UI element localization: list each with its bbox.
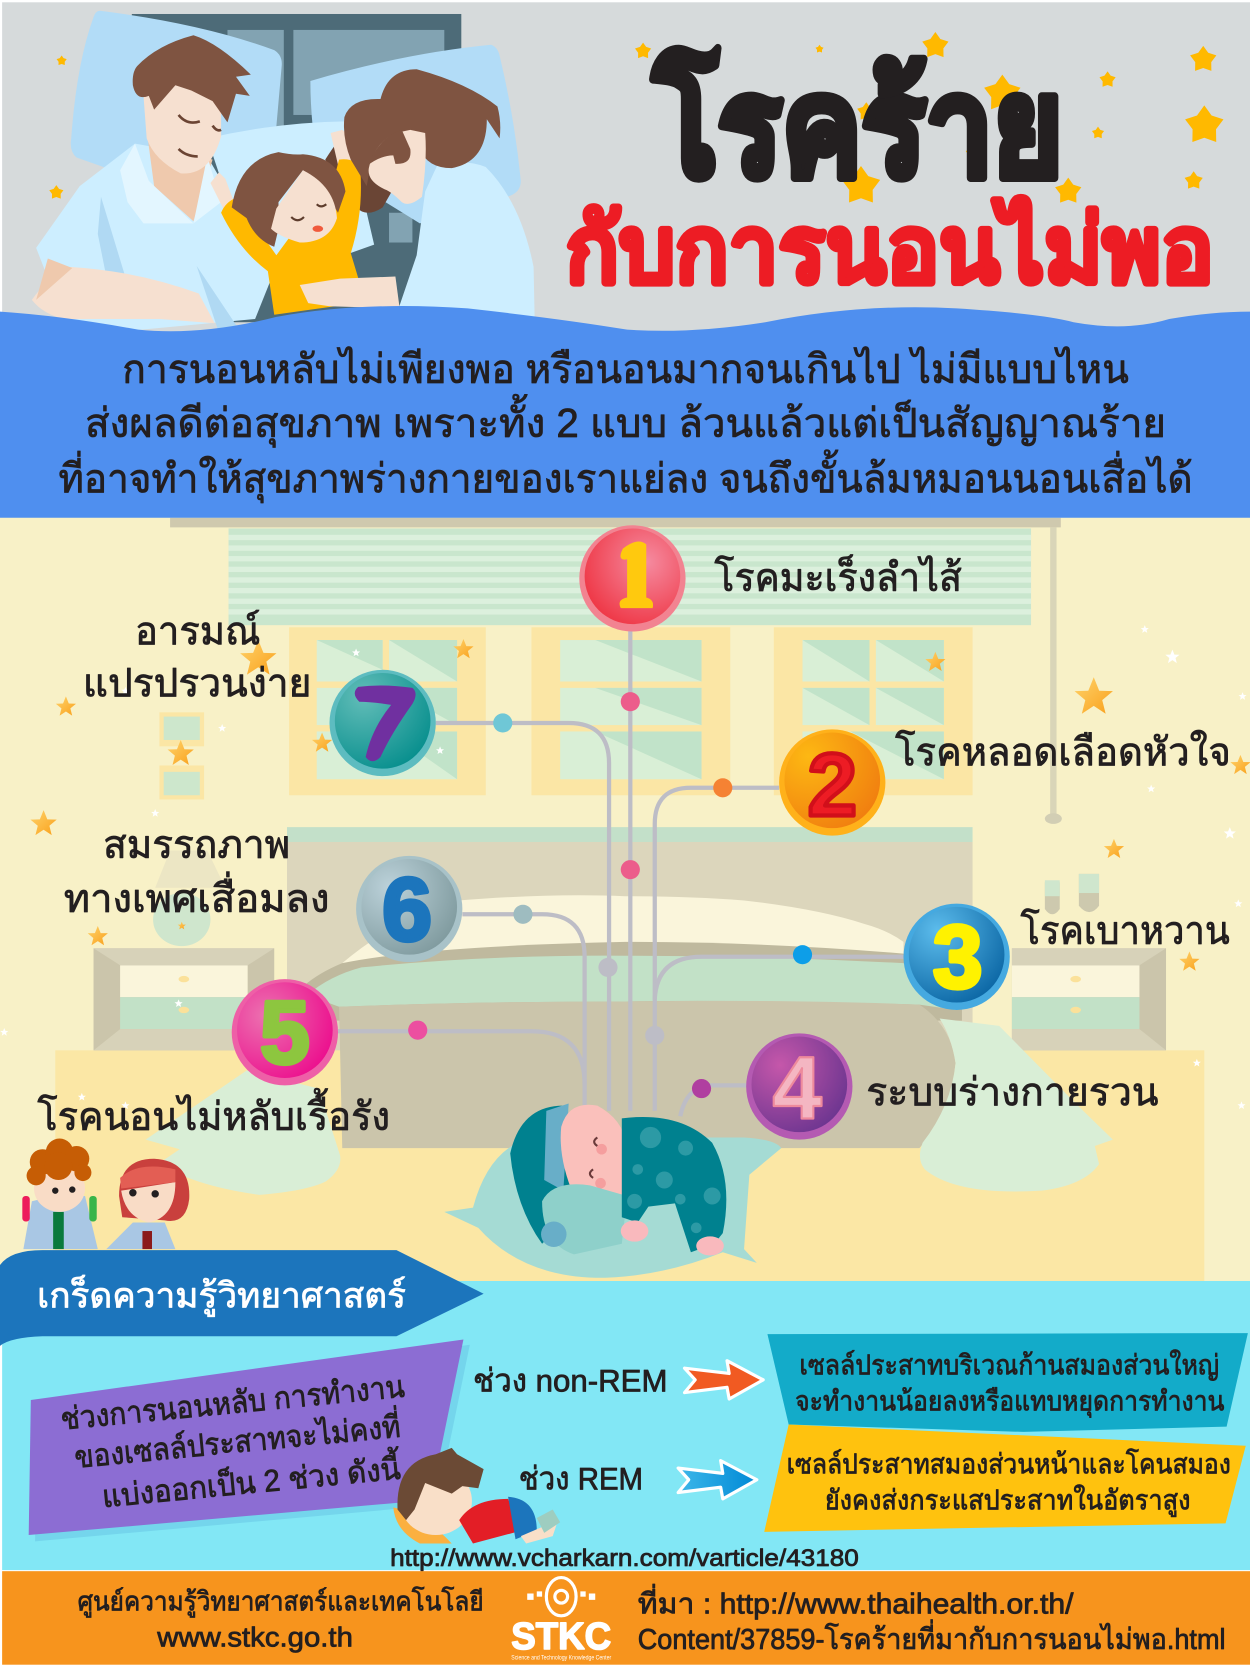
badge 2 [779, 729, 885, 836]
illustration: sleeping baby [444, 1103, 781, 1278]
illustration: sleeping family [32, 11, 535, 332]
boy pillow [393, 1507, 452, 1544]
left bed sheet [146, 1071, 340, 1195]
child left hand [210, 172, 236, 213]
blanket band [303, 942, 962, 1021]
badge 4: 4 [772, 1037, 822, 1137]
panel: science facts [0, 1250, 1250, 1572]
ribbon heading [0, 1250, 484, 1346]
label 6: สมรรถภาพ [103, 823, 290, 867]
badge 1 [579, 525, 686, 632]
child eyes mouth [291, 204, 326, 220]
label 7: แปรปรวนง่าย [83, 661, 311, 705]
center pillow [207, 121, 374, 279]
label 7 [83, 609, 311, 705]
man neck [148, 138, 213, 221]
boy hair [27, 1139, 91, 1185]
label 3: โรคเบาหวาน [1020, 908, 1230, 953]
intro text: ส่งผลดีต่อสุขภาพ เพราะทั้ง 2 แบบ ล้วนแล้วแต่เป็นสัญญาณร้าย [85, 394, 1166, 448]
wave shape [0, 306, 1250, 518]
window blind [229, 528, 1031, 625]
panel: footer [2, 1571, 1250, 1665]
badge 7 [330, 670, 436, 776]
icon: STKC logo: Science and Technology Knowledge Center [511, 1654, 612, 1661]
teal box [767, 1333, 1248, 1432]
suit spots [627, 1127, 721, 1233]
non-REM label: ช่วง non-REM [473, 1363, 668, 1399]
badge 3 [903, 904, 1010, 1010]
headboard [287, 827, 973, 1055]
badge 2: 2 [807, 734, 857, 834]
badge 6 [356, 856, 462, 962]
child mouth [312, 226, 323, 232]
girl coat [106, 1223, 175, 1249]
purple panel: ของเซลล์ประสาทจะไม่คงที่ [72, 1405, 402, 1475]
floor [55, 1050, 1204, 1282]
mattress [339, 1001, 956, 1148]
label 1: โรคมะเร็งลำไส้ [714, 554, 962, 600]
boy eyes [52, 1186, 75, 1194]
cyan background [2, 1281, 1250, 1570]
label 6 [64, 823, 330, 921]
wall [0, 510, 1250, 1286]
right candles [1045, 874, 1099, 914]
man collar [120, 144, 221, 223]
left nightstand [94, 948, 274, 1050]
baby head [561, 1105, 627, 1198]
girl face [121, 1182, 175, 1223]
girl tie [142, 1231, 152, 1249]
mother hair [344, 69, 500, 186]
child hair [232, 152, 345, 247]
boy sock [537, 1510, 560, 1533]
wall shelf [159, 712, 204, 799]
arrow: blue [678, 1461, 757, 1499]
purple panel [29, 1339, 470, 1541]
ribbon heading: เกร็ดความรู้วิทยาศาสตร์ [37, 1275, 406, 1317]
label 2: โรคหลอดเลือดหัวใจ [895, 729, 1231, 774]
boy hair [397, 1448, 484, 1520]
girl eyes [129, 1189, 159, 1198]
curtain pole right [1045, 527, 1062, 824]
yellow box [764, 1424, 1246, 1532]
badge 4 [746, 1033, 852, 1140]
mother face [369, 130, 426, 204]
intro text [58, 346, 1193, 503]
man arm [32, 267, 215, 323]
right pillow [310, 45, 521, 223]
illustration: scientist children [22, 1139, 189, 1249]
footer source text [638, 1584, 1226, 1656]
baby suit [622, 1117, 726, 1252]
child suit [221, 159, 361, 315]
yellow box: ยังคงส่งกระแสประสาทในอัตราสูง [825, 1485, 1190, 1518]
man shirt [36, 144, 274, 332]
footer background [2, 1571, 1250, 1665]
baby cheek [595, 1144, 607, 1189]
window right [774, 627, 973, 795]
arrow: orange [685, 1361, 763, 1399]
diagram: connector dots [408, 692, 812, 1098]
panel: header background [2, 2, 1250, 342]
badge 6: 6 [382, 859, 432, 959]
intro text: ที่อาจทำให้สุขภาพร่างกายของเราแย่ลง จนถึงขั้นล้มหมอนนอนเสื่อได้ [58, 449, 1193, 503]
child right hand [331, 130, 356, 165]
source url: http://www.vcharkarn.com/varticle/43180 [390, 1545, 859, 1572]
mother body [399, 162, 535, 319]
bed pillow [342, 895, 903, 973]
footer source text: Content/37859-โรคร้ายที่มากับการนอนไม่พอ.html [638, 1619, 1226, 1656]
man eyes and mouth [179, 115, 221, 156]
badge 5: 5 [260, 982, 310, 1082]
curtain rod [170, 518, 1061, 527]
boy test tubes [22, 1196, 97, 1221]
man upper arm [36, 258, 72, 300]
baby pillow [444, 1137, 781, 1278]
baby foot [621, 1220, 724, 1255]
mother arm [300, 277, 400, 308]
title [565, 49, 1214, 302]
mother dark hair [325, 117, 404, 213]
icon: STKC logo: STKC [511, 1615, 611, 1658]
illustration: sleeping boy [393, 1448, 560, 1544]
boy face [34, 1165, 85, 1212]
girl hair back [119, 1159, 189, 1221]
footer organisation text: www.stkc.go.th [156, 1622, 353, 1653]
REM label: ช่วง REM [519, 1460, 643, 1496]
footer organisation text [78, 1586, 484, 1653]
window left [289, 627, 486, 795]
badge 5 [232, 979, 338, 1085]
baby hand [541, 1221, 567, 1247]
boy shorts [508, 1497, 537, 1539]
boy legs [521, 1520, 558, 1544]
baby body hood [510, 1106, 595, 1244]
right bed sheet [920, 1018, 1113, 1192]
right nightstand [1012, 948, 1166, 1050]
footer organisation text: ศูนย์ความรู้วิทยาศาสตร์และเทคโนโลยี [78, 1586, 484, 1617]
label 5: โรคนอนไม่หลับเรื้อรัง [37, 1088, 390, 1139]
window behind family [132, 14, 461, 322]
baby eyes [590, 1137, 597, 1178]
label 7: อารมณ์ [135, 609, 260, 653]
diagram: connector lines [338, 627, 903, 1116]
baby hood band [544, 1103, 569, 1191]
man shirt shade [98, 197, 239, 330]
title line 2: กับการนอนไม่พอ [565, 196, 1214, 302]
title line 1: โรคร้าย [652, 49, 1063, 206]
header stars [49, 32, 1223, 203]
icon: STKC logo [511, 1578, 612, 1661]
purple panel: แบ่งออกเป็น 2 ช่วง ดังนี้ [100, 1446, 402, 1514]
purple panel: ช่วงการนอนหลับ การทำงาน [59, 1369, 406, 1437]
label 4: ระบบร่างกายรวน [866, 1071, 1159, 1115]
baby blanket [542, 1184, 627, 1254]
boy tie [53, 1212, 64, 1249]
left pillow [71, 11, 282, 176]
mother fringe [367, 130, 411, 166]
badge 3: 3 [933, 907, 983, 1007]
footer source text: ที่มา : http://www.thaihealth.or.th/ [638, 1584, 1074, 1621]
panel: room scene background [0, 510, 1250, 1286]
man face [143, 75, 221, 174]
window center [531, 627, 730, 795]
left lamp [153, 851, 225, 946]
boy head [400, 1467, 472, 1535]
child face [271, 170, 337, 243]
man hair [133, 35, 251, 122]
label 6: ทางเพศเสื่อมลง [64, 871, 330, 921]
blanket green [307, 956, 957, 1010]
boy coat [23, 1196, 98, 1249]
disease labels [37, 554, 1231, 1139]
panel: intro blue wave [0, 306, 1250, 518]
room stars [0, 625, 1250, 1109]
boy shirt [459, 1499, 521, 1544]
intro text: การนอนหลับไม่เพียงพอ หรือนอนมากจนเกินไป ไม่มีแบบไหน [122, 346, 1129, 392]
girl fringe [120, 1167, 175, 1189]
